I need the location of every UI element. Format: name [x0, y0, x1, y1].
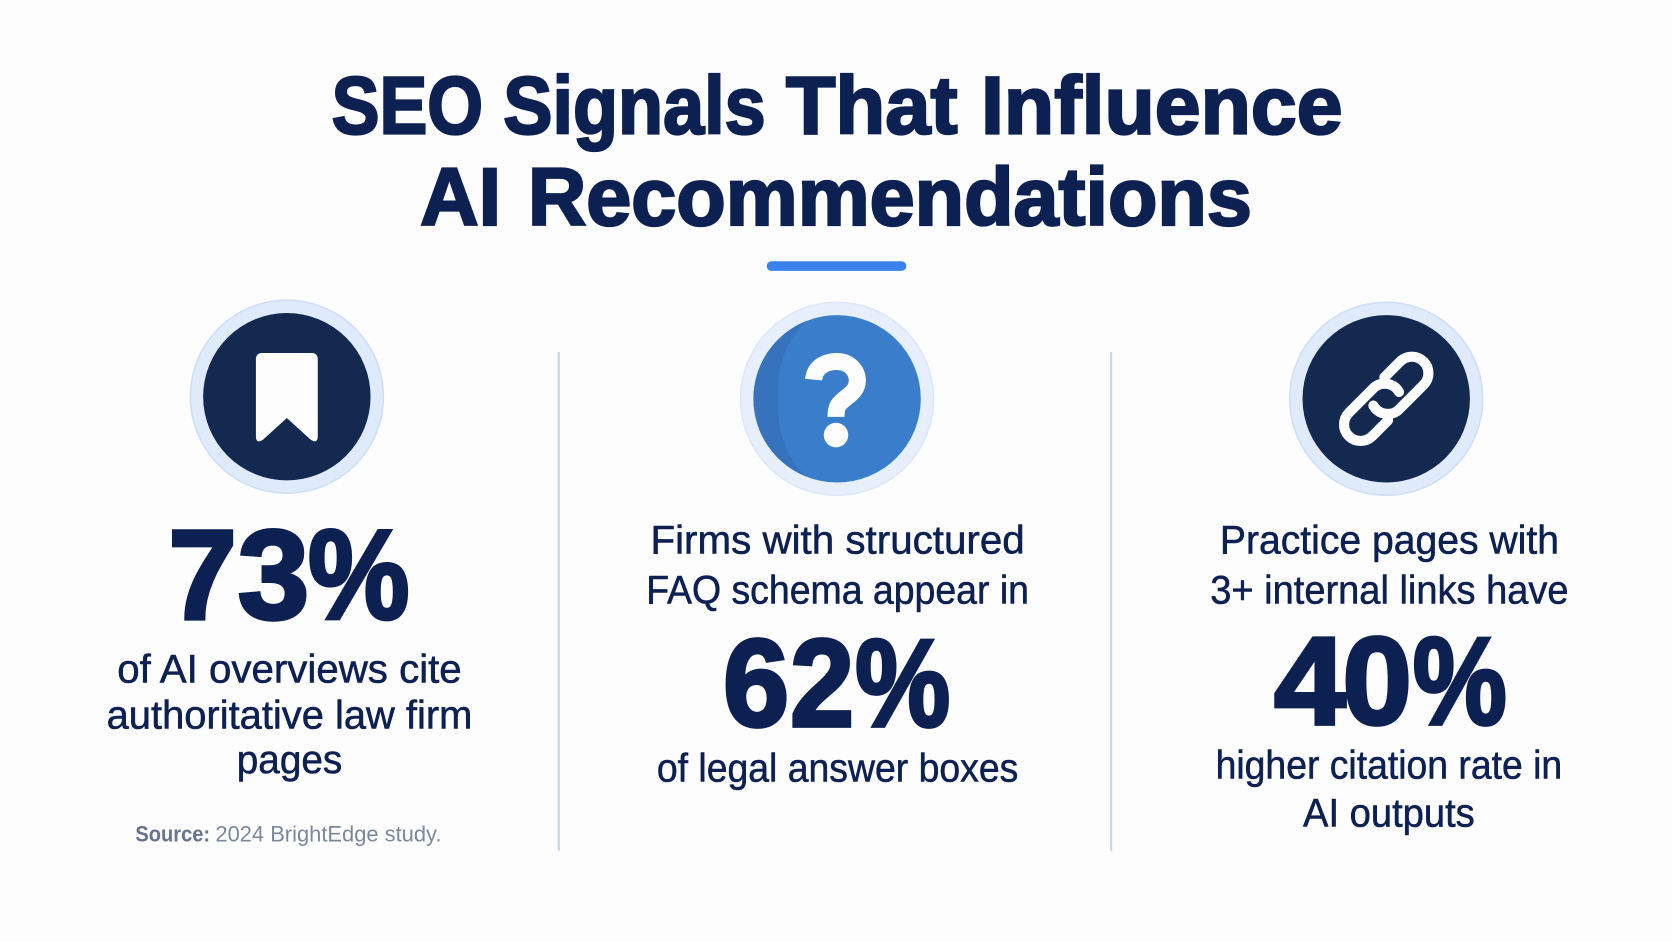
title accent bar — [767, 261, 906, 271]
intro text: Firms with structured — [650, 518, 1025, 562]
divider left — [558, 352, 560, 851]
description — [107, 647, 472, 782]
description: AI outputs — [1303, 791, 1475, 835]
panel: authoritative pages — [107, 300, 472, 846]
intro text — [646, 518, 1029, 613]
statistic 40% — [1274, 612, 1507, 751]
title: Recommendations — [528, 152, 1252, 243]
title: AI — [420, 152, 501, 243]
statistic 62% — [723, 614, 950, 753]
statistic 40%: 0 — [1343, 612, 1412, 751]
description — [1216, 743, 1562, 835]
intro text: 3+ internal links have — [1210, 569, 1569, 613]
description: of AI overviews cite — [117, 647, 462, 691]
title — [332, 60, 1343, 243]
panel: internal links — [1210, 302, 1569, 835]
statistic 73%: 3 — [238, 503, 309, 645]
panel: FAQ schema — [646, 302, 1029, 791]
divider right — [1110, 352, 1112, 851]
statistic 62%: % — [855, 614, 950, 753]
intro text: Practice pages with — [1220, 518, 1559, 562]
statistic 73% — [168, 503, 409, 645]
statistic 73%: % — [308, 503, 409, 645]
statistic 40%: % — [1413, 612, 1507, 751]
statistic 73%: 7 — [168, 503, 237, 645]
description: higher citation rate in — [1216, 743, 1562, 787]
title: Influence — [981, 60, 1343, 151]
intro text — [1210, 518, 1569, 613]
statistic 40%: 4 — [1274, 612, 1346, 751]
icon: chain link — [1290, 302, 1483, 495]
icon: bookmark — [190, 300, 383, 493]
intro text: FAQ schema appear in — [646, 569, 1029, 613]
description: authoritative law firm — [107, 693, 472, 737]
title: SEO — [332, 60, 483, 151]
statistic 62%: 2 — [790, 614, 854, 753]
statistic 62%: 6 — [723, 614, 789, 753]
description: of legal answer boxes — [657, 747, 1018, 791]
title: That — [786, 60, 958, 151]
description: pages — [237, 738, 342, 782]
source note: 2024 BrightEdge study. — [215, 821, 441, 846]
source note: Source: — [135, 821, 210, 846]
icon: question mark — [741, 302, 934, 495]
title: Signals — [503, 60, 766, 151]
